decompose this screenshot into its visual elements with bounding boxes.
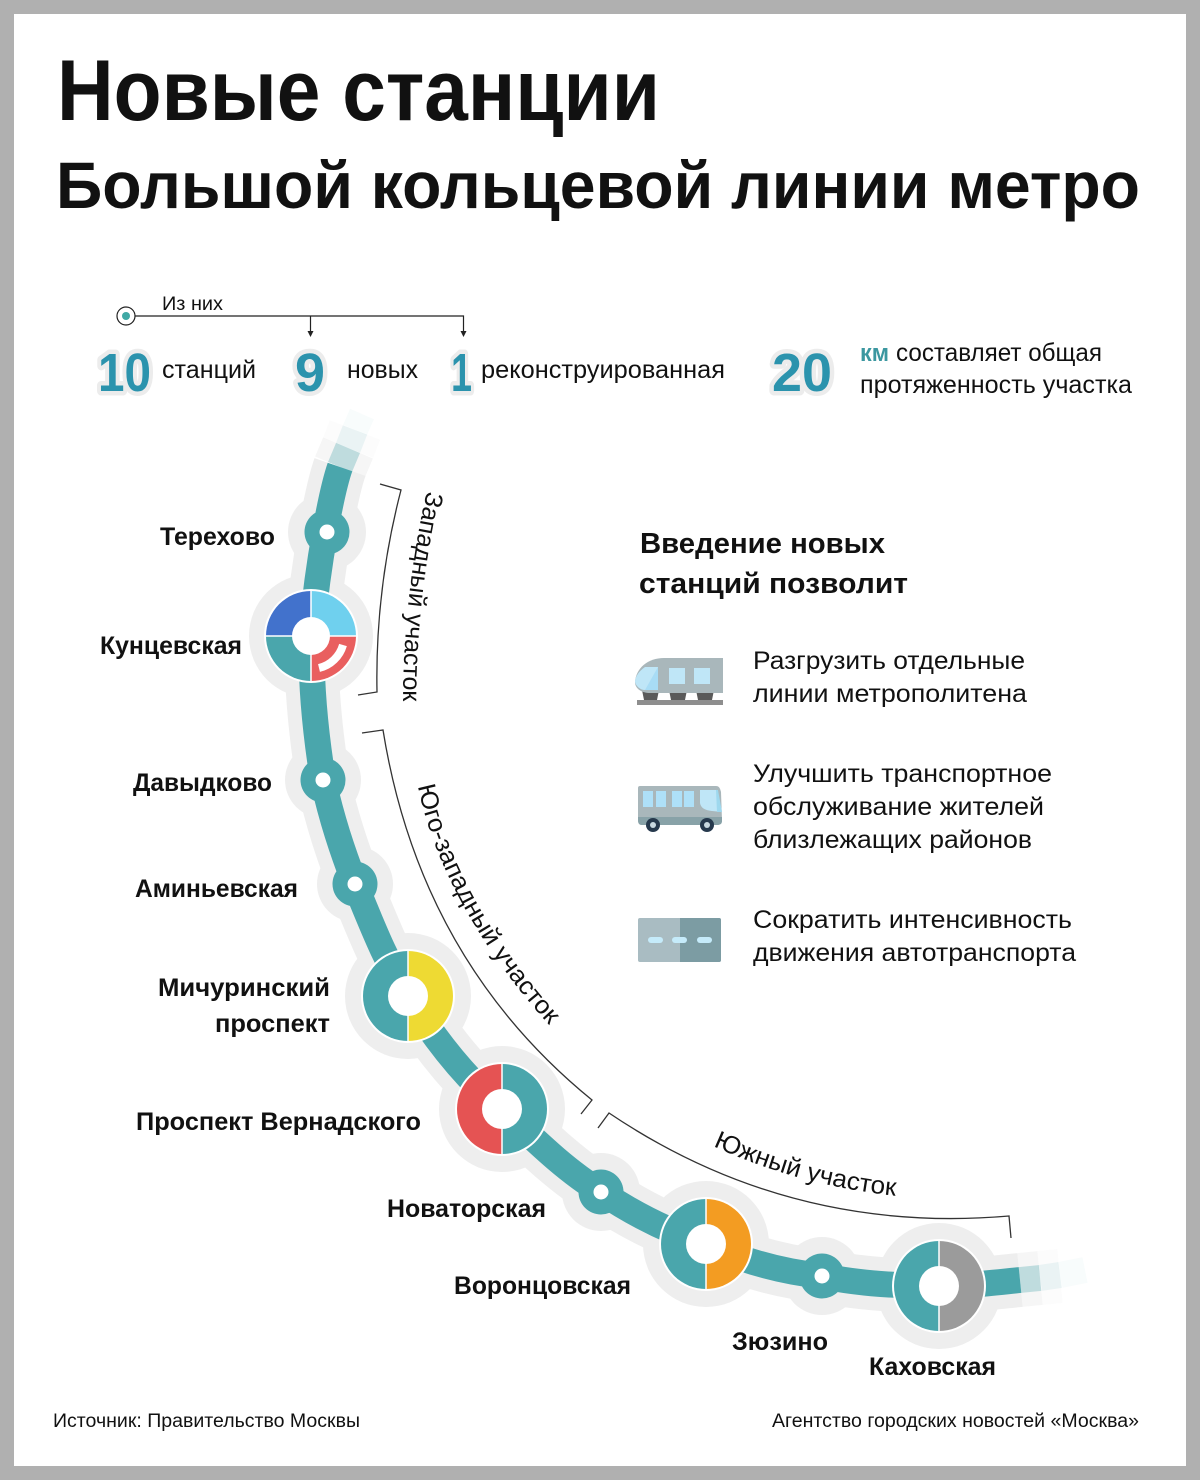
label: Давыдково: Давыдково — [133, 769, 272, 797]
line halo fade top — [340, 430, 355, 467]
benefit 1 text: Разгрузить отдельные — [753, 647, 1025, 675]
bracket: south: Южный участок — [715, 1131, 897, 1196]
footer source: Источник: Правительство Москвы — [53, 1411, 360, 1432]
station: Терехово — [304, 510, 350, 554]
benefit 1 text — [753, 647, 1027, 708]
stat: 10 stations: 10 — [98, 343, 151, 403]
station: Кунцевская — [264, 589, 358, 683]
stat: 20 km: 20 — [772, 343, 832, 403]
label: проспект: проспект — [215, 1010, 330, 1038]
stat: 20 km: составляет общая — [896, 339, 1102, 367]
title line 1: Новые станции — [57, 43, 660, 139]
halo station discs — [249, 493, 1002, 1349]
station: Проспект Вернадского — [455, 1062, 549, 1156]
stat: 9 new: новых — [347, 356, 418, 384]
bracket: south-west: Юго-западный участок — [418, 784, 559, 1026]
title — [56, 43, 1140, 222]
title line 2: Большой кольцевой линии метро — [56, 148, 1140, 222]
benefit 2 text: обслуживание жителей — [753, 793, 1044, 821]
from them label: Из них — [162, 294, 224, 315]
line halo — [312, 467, 1020, 1286]
station: Аминьевская — [332, 862, 378, 906]
label: Аминьевская: Аминьевская — [135, 875, 298, 903]
label: Зюзино: Зюзино — [732, 1328, 828, 1356]
benefits heading — [639, 528, 908, 600]
stat tree connector — [117, 294, 466, 337]
stat: 20 km: протяженность участка — [860, 371, 1132, 399]
stat: 10 stations: станций — [162, 356, 256, 384]
stat: 1 reconstructed — [451, 343, 725, 403]
label: Воронцовская: Воронцовская — [454, 1272, 631, 1300]
station: Мичуринский проспект — [361, 949, 455, 1043]
benefits heading: станций позволит — [639, 568, 908, 600]
stat: 10 stations — [98, 343, 256, 403]
benefit 2 text — [753, 760, 1052, 854]
benefit 3 text: движения автотранспорта — [753, 939, 1076, 967]
stat: 9 new — [295, 343, 418, 403]
station labels — [100, 523, 996, 1381]
stat: 1 reconstructed: 1 — [451, 343, 472, 403]
benefit 1 text: линии метрополитена — [753, 680, 1027, 708]
stat: 20 km: км — [860, 340, 889, 367]
benefits panel — [635, 528, 1076, 967]
benefit 3 text — [753, 906, 1076, 967]
stat: 20 km — [772, 339, 1132, 403]
station: Зюзино — [800, 1254, 844, 1298]
footer agency: Агентство городских новостей «Москва» — [772, 1411, 1139, 1432]
benefits heading: Введение новых — [640, 528, 885, 560]
icon: road — [638, 918, 721, 962]
stats row — [98, 339, 1132, 403]
section brackets — [358, 483, 1012, 1238]
bracket: south — [598, 1112, 1012, 1238]
benefit 3 text: Сократить интенсивность — [753, 906, 1072, 934]
label: Терехово: Терехово — [160, 523, 275, 551]
benefit 2 text: близлежащих районов — [753, 826, 1032, 854]
label: Кунцевская: Кунцевская — [100, 632, 242, 660]
label: Мичуринский: Мичуринский — [158, 974, 330, 1002]
metro line map — [249, 414, 1085, 1349]
line halo fade right — [1020, 1276, 1060, 1280]
stat: 1 reconstructed: реконструированная — [481, 356, 725, 384]
line fade top — [340, 414, 362, 467]
station: Воронцовская — [659, 1197, 753, 1291]
station: Каховская — [892, 1239, 986, 1333]
label: Каховская: Каховская — [869, 1353, 996, 1381]
bracket: south-west — [362, 729, 593, 1114]
icon: bus — [638, 786, 722, 832]
bracket: west: Западный участок — [402, 492, 443, 702]
icon: train — [635, 658, 723, 705]
benefit 2 text: Улучшить транспортное — [753, 760, 1052, 788]
bracket: west — [358, 483, 443, 702]
line — [312, 467, 1020, 1286]
station: Давыдково — [300, 758, 346, 802]
label: Новаторская: Новаторская — [387, 1195, 546, 1223]
stat: 9 new: 9 — [295, 343, 325, 403]
station: Новаторская — [578, 1170, 624, 1214]
line fade right — [1020, 1270, 1085, 1280]
label: Проспект Вернадского: Проспект Вернадского — [136, 1108, 421, 1136]
